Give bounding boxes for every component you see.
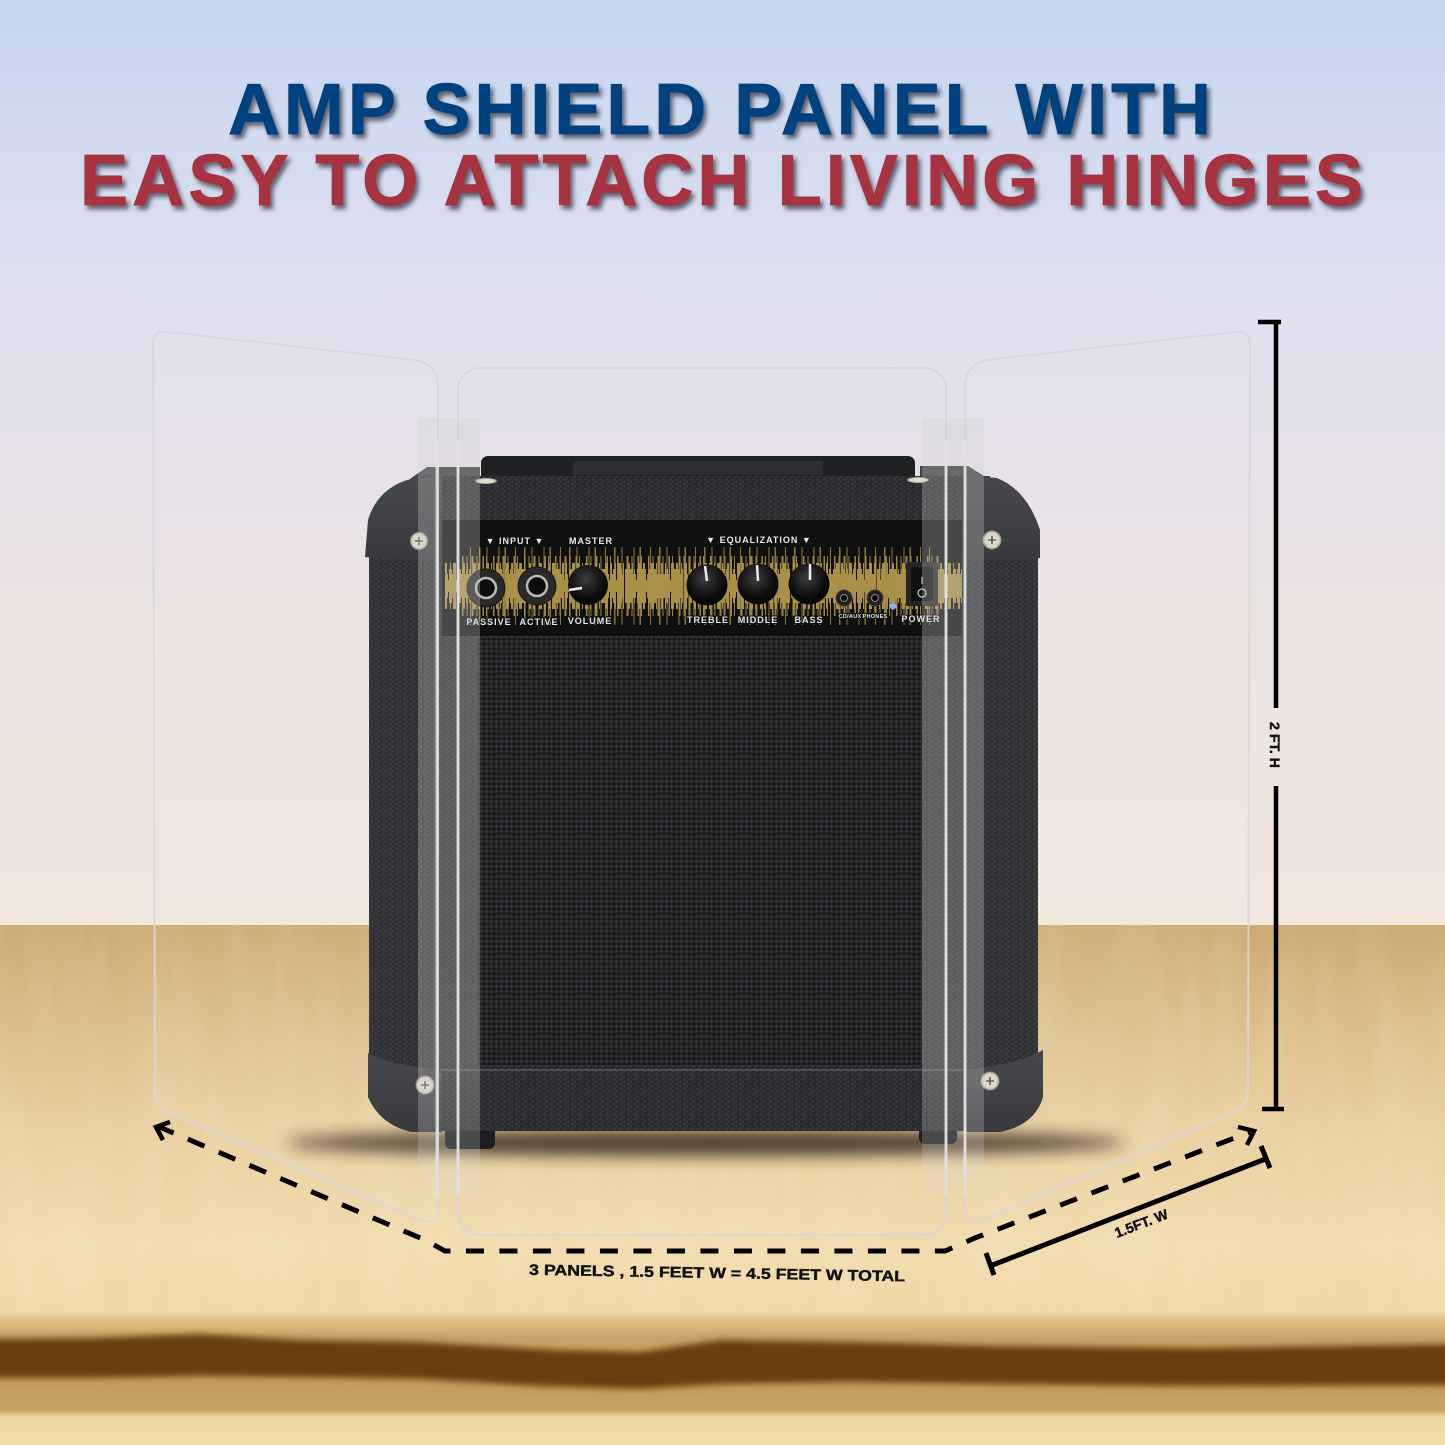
cabinet screws: [410, 477, 1002, 1094]
floor wood grain: [0, 925, 1445, 1315]
control panel labels: TREBLE: [687, 615, 729, 625]
bottom seam: [440, 1069, 968, 1071]
bottom right corner cap: [966, 1050, 1043, 1132]
right acrylic panel: [965, 332, 1250, 1221]
screw slots: [415, 536, 996, 1089]
top right corner cap: [966, 475, 1040, 561]
title: [80, 70, 1367, 221]
control panel labels: PASSIVE: [466, 617, 512, 627]
gold waveform: [445, 580, 962, 592]
amp top rim: [400, 466, 1000, 486]
right living hinge: [922, 418, 984, 1198]
input jack: passive: [467, 569, 505, 607]
width dimension: 1.5 ft: 1.5FT. W: [1112, 1206, 1171, 1241]
phones jack: [867, 590, 883, 606]
aux jack: [836, 590, 852, 606]
amp floor shadow: [285, 1130, 1125, 1156]
bottom band: [420, 1068, 990, 1131]
dashed footprint arrow: [156, 1122, 1254, 1251]
control panel labels: POWER: [901, 614, 941, 624]
bottom left corner cap: [368, 1053, 442, 1132]
top left corner cap: [365, 475, 442, 560]
left acrylic panel: [153, 332, 438, 1221]
control panel: [442, 520, 962, 636]
control panel labels: [466, 535, 941, 627]
title line 1: AMP SHIELD PANEL WITH: [228, 70, 1215, 150]
amp feet: [445, 1120, 957, 1149]
total width caption: 3 PANELS , 1.5 FEET W = 4.5 FEET W TOTAL: [529, 1262, 905, 1285]
center acrylic panel: [458, 368, 946, 1235]
control panel labels: MIDDLE: [738, 615, 778, 625]
control panel labels: VOLUME: [568, 616, 612, 626]
speaker grille: [478, 637, 922, 1065]
amp cabinet body: [369, 540, 1038, 1070]
bass knob: [788, 564, 830, 604]
control panel labels: ▼ INPUT ▼: [486, 536, 544, 546]
middle knob: [738, 564, 778, 604]
amp carry handle: [481, 456, 915, 490]
title line 2: EASY TO ATTACH LIVING HINGES: [80, 141, 1367, 221]
status LED: [890, 602, 896, 610]
control panel labels: ▼ EQUALIZATION ▼: [706, 535, 812, 545]
control panel labels: ACTIVE: [519, 617, 559, 627]
control panel labels: PHONES: [862, 614, 888, 620]
input jack: active: [518, 567, 556, 605]
width dimension: 1.5 ft: [986, 1146, 1270, 1275]
volume knob: [568, 565, 608, 605]
control panel labels: CD/AUX: [839, 614, 861, 620]
top tolex strip: [420, 476, 990, 546]
control panel labels: MASTER: [569, 536, 613, 546]
guitar amplifier: [365, 456, 1043, 1149]
left living hinge: [418, 418, 480, 1199]
wall background: [0, 0, 1445, 926]
wooden floor: [0, 925, 1445, 1325]
wooden table front edge: [0, 1312, 1445, 1445]
power switch: [906, 562, 938, 606]
treble knob: [686, 564, 728, 606]
control panel labels: BASS: [794, 615, 824, 625]
height dimension: 2 ft: [1258, 322, 1284, 1109]
height dimension: 2 ft: 2 FT. H: [1267, 722, 1282, 768]
